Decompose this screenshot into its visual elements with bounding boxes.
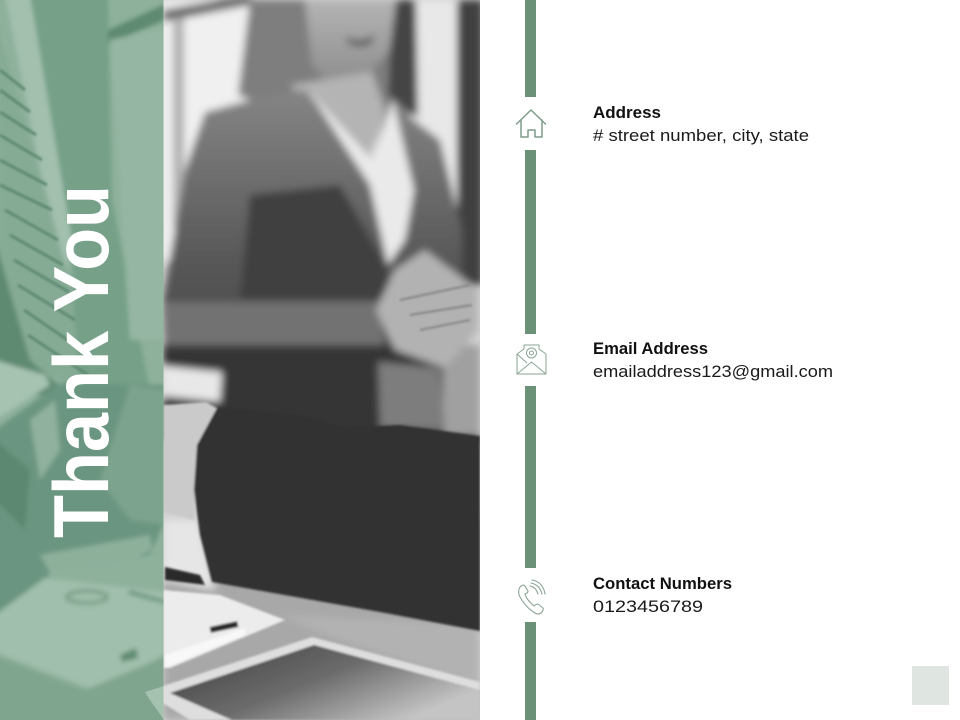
panel: green photo overlay: [0, 0, 165, 720]
text: email address: emailaddress123@gmail.com: [593, 362, 833, 381]
text: address: # street number, city, state: [593, 126, 809, 145]
icon: phone: [519, 580, 545, 614]
text: address: [593, 103, 809, 145]
icon: house: [516, 110, 546, 137]
text: address: Address: [593, 103, 661, 122]
panel: grayscale photo of woman and handshake: [145, 0, 483, 720]
text: contact numbers: Contact Numbers: [593, 574, 732, 593]
text: email address: Email Address: [593, 339, 708, 358]
text: contact numbers: [593, 574, 732, 616]
vertical green timeline bar: [525, 0, 536, 720]
decorative corner square: [912, 666, 949, 705]
text: email address: [593, 339, 833, 381]
icon: email envelope: [517, 345, 546, 374]
text: contact numbers: 0123456789: [593, 597, 703, 616]
title: Thank You: Thank You: [37, 185, 125, 538]
